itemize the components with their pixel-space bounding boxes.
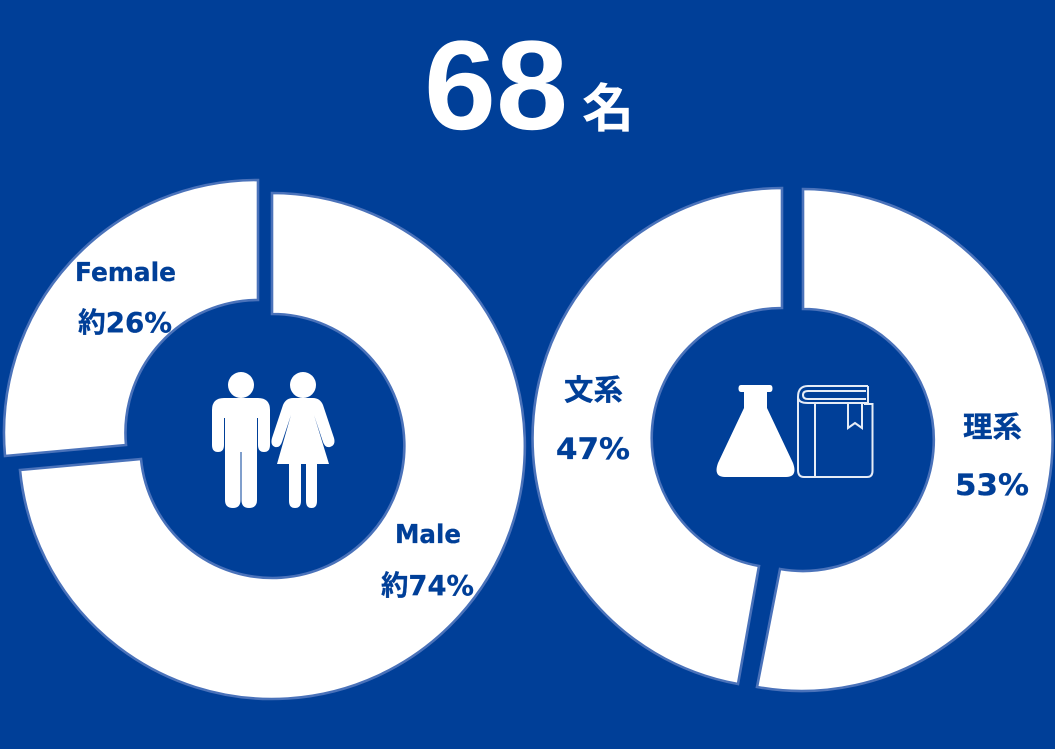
title: 68 名 <box>424 14 634 156</box>
label: humanities 47%: 47% <box>556 432 630 466</box>
label: science 53% <box>955 410 1029 502</box>
icon: woman <box>271 372 334 508</box>
title: 68 名: 68 <box>424 14 568 156</box>
slice: science 53% <box>757 189 1053 691</box>
slice: female 26% <box>4 180 258 456</box>
icon: man <box>212 372 270 508</box>
label: humanities 47%: 文系 <box>564 373 623 407</box>
label: Female 26%: 約26% <box>78 306 172 339</box>
title: 68 名: 名 <box>582 81 634 139</box>
slice: humanities 47% <box>533 188 782 684</box>
icon: flask <box>717 385 794 477</box>
donut chart: field of study <box>533 188 1053 691</box>
label: humanities 47% <box>556 373 630 466</box>
icon: man and woman <box>212 372 334 508</box>
label: Female 26%: Female <box>75 258 176 288</box>
slice: male 74% <box>20 193 525 699</box>
donut chart: gender <box>4 180 525 699</box>
label: science 53%: 53% <box>955 468 1029 502</box>
label: Male 74%: Male <box>395 520 461 550</box>
label: Female 26% <box>75 258 176 339</box>
label: science 53%: 理系 <box>963 410 1022 444</box>
label: Male 74% <box>381 520 474 602</box>
label: Male 74%: 約74% <box>381 569 474 602</box>
icon: book <box>798 386 872 477</box>
